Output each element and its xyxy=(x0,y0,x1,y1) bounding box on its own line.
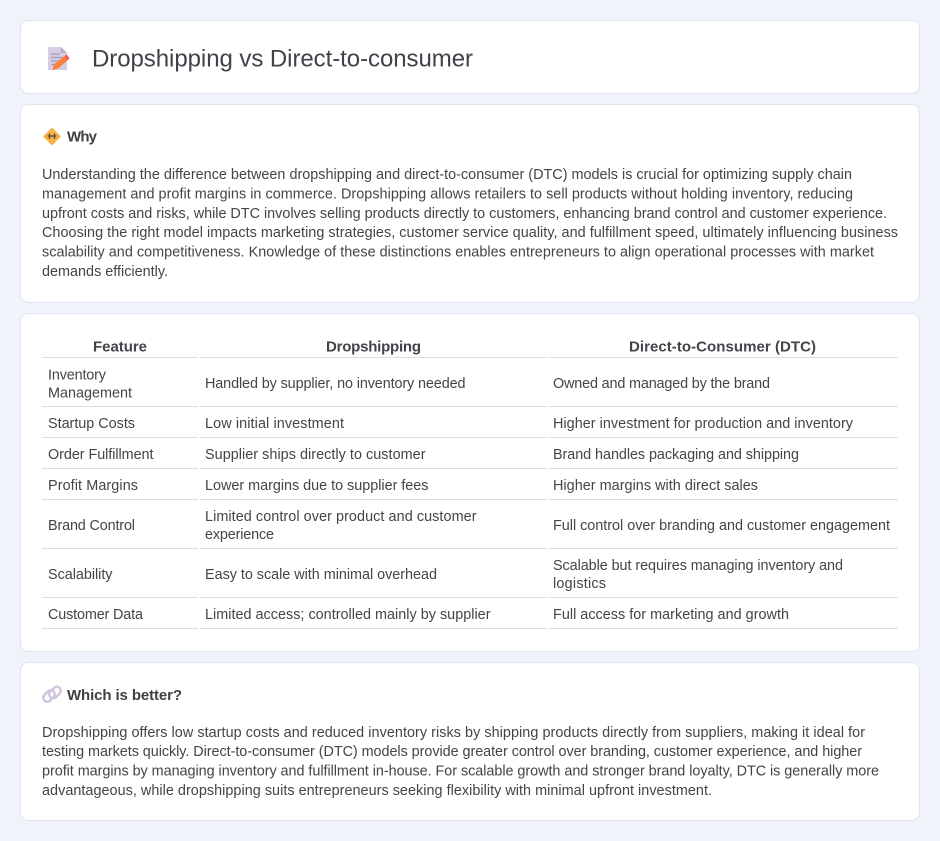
row: scalability: Scalable but requires managing inventory and xyxy=(553,558,843,574)
panel: header xyxy=(20,20,920,94)
row: inventory management: Handled by supplier, no inventory needed xyxy=(205,376,466,392)
row: order fulfillment xyxy=(42,447,898,469)
row: scalability: logistics xyxy=(553,576,606,592)
table header row: Direct-to-Consumer (DTC) xyxy=(629,339,816,356)
row: brand control: Brand Control xyxy=(48,518,135,534)
row: order fulfillment: Brand handles packaging and shipping xyxy=(553,447,799,463)
row: brand control: Full control over branding and customer engagement xyxy=(553,518,890,534)
panel: why xyxy=(20,104,920,302)
table header row: Feature xyxy=(93,339,147,356)
text block: which is better paragraph: advantageous, while dropshipping suits entrepreneurs seeking flexibility with minimal upfront investment. xyxy=(42,783,712,799)
text block: which is better paragraph: testing markets quickly. Direct-to-consumer (DTC) models provide greater control over branding, customer experience, and higher xyxy=(42,744,862,760)
row: customer data: Limited access; controlled mainly by supplier xyxy=(205,607,491,623)
text block: which is better paragraph: Dropshipping offers low startup costs and reduced inventory risks by shipping products directly from suppliers, making it ideal for xyxy=(42,725,865,741)
row: inventory management: Management xyxy=(48,386,132,402)
row: scalability: Easy to scale with minimal overhead xyxy=(205,567,437,583)
row: startup costs: Higher investment for production and inventory xyxy=(553,416,854,432)
row: scalability xyxy=(42,558,898,598)
icon: memo with pencil xyxy=(48,47,70,70)
icon: link xyxy=(42,685,62,703)
row: inventory management: Owned and managed by the brand xyxy=(553,376,770,392)
row: scalability: Scalability xyxy=(48,567,113,583)
row: brand control xyxy=(42,509,898,549)
panel: which is better xyxy=(20,662,920,820)
icon: construction diamond xyxy=(44,128,60,144)
row: inventory management xyxy=(42,368,898,407)
text block: why paragraph: demands efficiently. xyxy=(42,264,168,280)
row: order fulfillment: Supplier ships directly to customer xyxy=(205,447,426,463)
panel: comparison table xyxy=(20,314,920,652)
row: profit margins: Lower margins due to supplier fees xyxy=(205,478,428,494)
row: customer data: Full access for marketing and growth xyxy=(553,607,789,623)
row: startup costs: Low initial investment xyxy=(205,416,344,432)
row: customer data: Customer Data xyxy=(48,607,143,623)
row: order fulfillment: Order Fulfillment xyxy=(48,447,154,463)
heading: why: Why xyxy=(67,128,98,146)
text block: why paragraph: Choosing the right model impacts marketing strategies, customer service quality, and fulfillment speed, ultimately influencing business xyxy=(42,225,898,241)
row: profit margins: Higher margins with direct sales xyxy=(553,478,758,494)
text block: which is better paragraph xyxy=(42,725,879,799)
text block: why paragraph: management and profit margins in commerce. Dropshipping allows retailers to sell products without holding inventory, reducing xyxy=(42,186,853,202)
text block: why paragraph: upfront costs and risks, while DTC involves selling products directly to customers, enhancing brand control and customer experience. xyxy=(42,206,887,222)
title: Dropshipping vs Direct-to-consumer xyxy=(92,46,473,72)
row: inventory management: Inventory xyxy=(48,368,107,384)
table header row: Dropshipping xyxy=(326,339,421,356)
row: customer data xyxy=(42,607,898,629)
text block: which is better paragraph: profit margins by managing inventory and fulfillment in-house. For scalable growth and stronger brand loyalty, DTC is generally more xyxy=(42,764,879,780)
heading: which is better: Which is better? xyxy=(67,687,182,704)
row: startup costs xyxy=(42,416,898,438)
row: startup costs: Startup Costs xyxy=(48,416,135,432)
text block: why paragraph: Understanding the difference between dropshipping and direct-to-consumer (DTC) models is crucial for optimizing supply chain xyxy=(42,167,852,183)
table header row xyxy=(42,339,898,358)
row: profit margins: Profit Margins xyxy=(48,478,138,494)
row: brand control: experience xyxy=(205,527,274,543)
text block: why paragraph xyxy=(42,167,898,280)
row: brand control: Limited control over product and customer xyxy=(205,509,477,525)
row: profit margins xyxy=(42,478,898,500)
text block: why paragraph: scalability and competitiveness. Knowledge of these distinctions enables entrepreneurs to align operational processes with market xyxy=(42,245,874,261)
